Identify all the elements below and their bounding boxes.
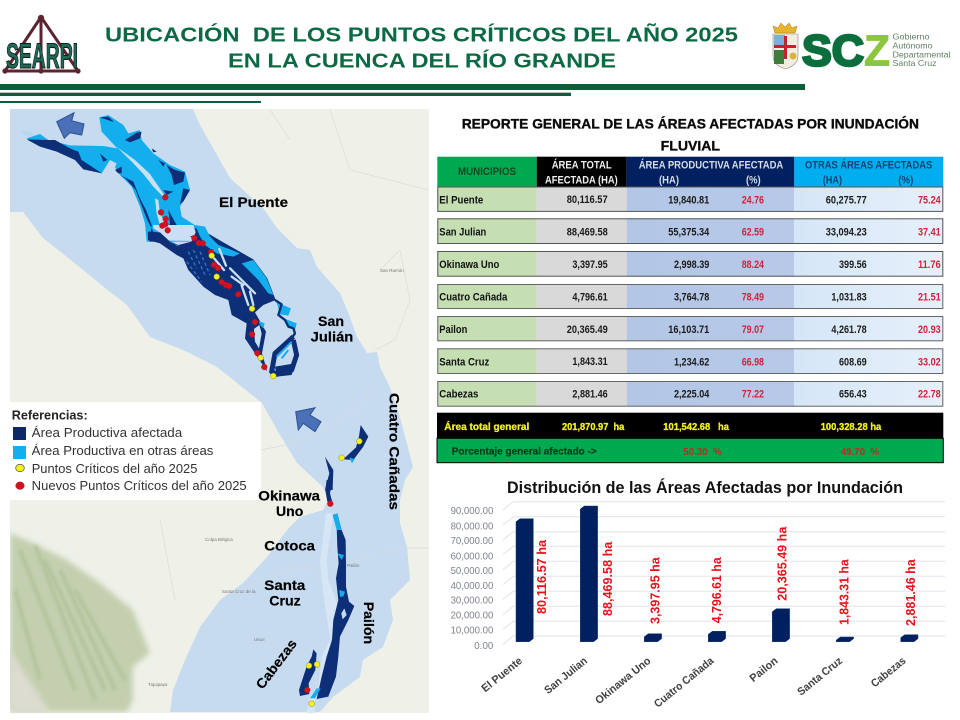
row: Santa Cruz: 1,843.31: [572, 356, 608, 368]
icon: crown: [773, 23, 797, 33]
logo: Gobierno Autónomo Departamental Santa Cruz: [773, 23, 951, 76]
logo: Gobierno Autónomo Departamental Santa Cruz: Santa Cruz: [892, 58, 936, 68]
bar: Okinawa Uno: [644, 634, 662, 642]
bar chart: [451, 502, 945, 710]
row: Cabezas: 2,881.46: [572, 388, 608, 400]
row: Okinawa Uno: [437, 251, 943, 277]
category labels: Santa Cruz: [795, 655, 845, 698]
table header: (%): [898, 175, 914, 187]
map label: Cabezas: Cabezas: [253, 636, 300, 692]
row: Cabezas: [437, 381, 943, 407]
row: San Julian: 55,375.34: [668, 227, 710, 239]
row: San Julian: San Julian: [439, 227, 487, 239]
row: Pailon: [437, 316, 943, 341]
map label: Pailón: Pailón: [361, 602, 376, 644]
map: Cuatro Cañadas patch: [349, 457, 355, 463]
data labels: 2,881.46 ha: [904, 558, 918, 626]
row: Okinawa Uno: 3,397.95: [572, 259, 608, 271]
row: Santa Cruz: 66.98: [742, 356, 764, 368]
map: loop lower mass: [275, 364, 292, 377]
total row: [437, 413, 943, 438]
table header: OTRAS ÁREAS AFECTADAS: [805, 158, 932, 172]
table header: MUNICIPIOS: [458, 166, 516, 178]
map: middle river flood area: [148, 225, 297, 377]
logo: Gobierno Autónomo Departamental Santa Cruz: Autónomo: [892, 40, 933, 50]
logo: Gobierno Autónomo Departamental Santa Cruz: Z: [864, 26, 890, 76]
row: Cuatro Cañada: 3,764.78: [674, 292, 709, 304]
map: roads and places: Usuri: [254, 637, 265, 642]
map label: San Julián: Julián: [311, 330, 353, 345]
bar: San Julian: [580, 506, 598, 642]
logo: SEARPI: [2, 15, 81, 77]
row: Cabezas: 77.22: [742, 389, 764, 401]
row: El Puente: 19,840.81: [668, 194, 709, 206]
legend: Referencias:: [12, 408, 88, 422]
row: Santa Cruz: Santa Cruz: [439, 356, 490, 368]
chart title: Distribución de las Áreas Afectadas por Inundación: [507, 478, 903, 497]
header rule lines: [0, 84, 805, 103]
map: pale channels: [213, 249, 255, 305]
map: light tip: [259, 321, 265, 328]
y axis labels: 80,000.00: [451, 521, 493, 533]
logo: Gobierno Autónomo Departamental Santa Cruz: SC: [802, 26, 864, 76]
bars: [516, 506, 918, 642]
title: [105, 22, 738, 72]
map: flecks: [170, 242, 210, 282]
map: small channel hole: [254, 325, 262, 348]
map: Cuatro Cañadas flood area: [325, 425, 368, 490]
bar: Pailon: [772, 609, 790, 642]
map label: Okinawa Uno: [258, 490, 320, 516]
map label: Okinawa Uno: Okinawa: [258, 489, 321, 504]
row: San Julian: 33,094.23: [826, 227, 867, 239]
row: El Puente: El Puente: [439, 194, 483, 206]
map: river channel: [118, 148, 192, 241]
panel: map: [10, 109, 429, 713]
row: Cuatro Cañada: 1,031.83: [831, 292, 867, 304]
row: Pailon: 16,103.71: [668, 324, 709, 336]
category labels: Cabezas: [869, 655, 908, 690]
map: loop: [272, 337, 297, 374]
row: Santa Cruz: 1,234.62: [674, 356, 709, 368]
report heading: REPORTE GENERAL DE LAS ÁREAS AFECTADAS POR INUNDACIÓN: [462, 114, 919, 131]
row: El Puente: 75.24: [918, 194, 941, 206]
category labels: El Puente: [479, 655, 525, 695]
bar: El Puente: [516, 519, 533, 642]
y axis labels: 20,000.00: [451, 609, 493, 621]
y axis labels: 10,000.00: [451, 624, 493, 636]
row: El Puente: 24.76: [742, 194, 764, 206]
report heading: [462, 114, 919, 154]
y axis labels: 40,000.00: [451, 580, 493, 592]
bar: Santa Cruz: [836, 637, 854, 642]
category labels: San Julian: [542, 655, 590, 697]
row: Santa Cruz: [437, 348, 943, 374]
map: new critical points: [158, 194, 333, 693]
map: upper river flood area: [20, 115, 203, 242]
table header: ÁREA PRODUCTIVA AFECTADA: [639, 158, 783, 172]
map: roads and places: Tiquipaya: [148, 682, 168, 687]
map: Okinawa flood area: [325, 457, 333, 490]
row: Cuatro Cañada: 4,796.61: [572, 292, 608, 304]
legend: [10, 402, 261, 500]
map: roads and places: San Ramón: [380, 268, 404, 273]
row: Pailon: 20.93: [918, 324, 941, 336]
row: Cuatro Cañada: 21.51: [918, 292, 941, 304]
data labels: 80,116.57 ha: [535, 539, 549, 614]
map label: San Julián: San: [318, 314, 344, 329]
map: pale channel behind: [153, 225, 196, 236]
category labels: [479, 654, 908, 710]
row: Cuatro Cañada: Cuatro Cañada: [439, 292, 508, 304]
map label: Santa Cruz: Cruz: [269, 594, 301, 609]
y axis labels: 90,000.00: [451, 505, 493, 517]
row: Cabezas: 2,225.04: [674, 389, 710, 401]
map: north-east spine: [275, 300, 295, 338]
icon: shield: [773, 34, 798, 69]
table header: [437, 157, 943, 187]
y axis labels: [451, 505, 493, 652]
row: Okinawa Uno: Okinawa Uno: [439, 259, 500, 271]
row: Pailon: 4,261.78: [831, 324, 867, 336]
logo: Gobierno Autónomo Departamental Santa Cruz: Gobierno: [892, 32, 930, 42]
map background: [10, 109, 429, 713]
row: San Julian: 37.41: [918, 227, 941, 239]
row: El Puente: 60,275.77: [826, 194, 867, 206]
terrain: mountains: [10, 533, 150, 712]
bar: Cuatro Cañada: [708, 631, 726, 642]
panel: report table: [437, 157, 943, 463]
percentage row: 49.70 %: [841, 446, 880, 458]
row: Okinawa Uno: 88.24: [742, 259, 765, 271]
data labels: 3,397.95 ha: [648, 556, 662, 624]
row: Okinawa Uno: 2,998.39: [674, 259, 709, 271]
legend: Nuevos Puntos Críticos del año 2025: [32, 478, 247, 493]
table header: (%): [746, 175, 761, 187]
map label: Santa Cruz: [264, 580, 306, 606]
row: Cuatro Cañada: [437, 284, 943, 309]
table header: AFECTADA (HA): [545, 175, 618, 187]
row: Pailon: Pailon: [439, 324, 468, 336]
row: Cuatro Cañada: 78.49: [742, 292, 764, 304]
bar: Cabezas: [901, 635, 918, 642]
row: Okinawa Uno: 399.56: [839, 259, 867, 271]
row: El Puente: 80,116.57: [567, 194, 608, 206]
map: basin area: [10, 109, 413, 712]
data labels: 4,796.61 ha: [710, 556, 724, 623]
table header: (HA): [659, 175, 679, 187]
legend: Área Productiva afectada: [32, 425, 183, 440]
map label: Santa Cruz: Santa: [264, 578, 306, 593]
map: roads and places: Pailón: [347, 563, 360, 568]
row: San Julian: 62.59: [742, 227, 764, 239]
map: critical points: [209, 253, 362, 707]
y axis labels: 60,000.00: [451, 550, 493, 562]
row: El Puente: [437, 187, 943, 212]
y axis labels: 70,000.00: [451, 535, 493, 547]
row: Pailon: 79.07: [742, 324, 764, 336]
map label: San Julián: [310, 316, 352, 342]
map: roads and places: Santa Cruz de la: [222, 589, 256, 594]
percentage row: [437, 438, 943, 463]
row: San Julian: [437, 218, 943, 244]
map: north-east light patches: [195, 225, 297, 331]
total row: Área total general: [444, 420, 529, 433]
category labels: Okinawa Uno: [593, 655, 654, 707]
table header: (HA): [823, 175, 842, 187]
y axis labels: 50,000.00: [451, 565, 493, 577]
row: San Julian: 88,469.58: [567, 226, 608, 238]
table header: ÁREA TOTAL: [552, 158, 612, 172]
map: Cabezas flood area: [299, 649, 317, 696]
chart grid: [503, 502, 945, 644]
arrow: middle flow direction: [296, 408, 321, 432]
y axis labels: 0.00: [474, 640, 493, 652]
title: EN LA CUENCA DEL RÍO GRANDE: [228, 50, 616, 72]
map: main flooded mass: [148, 230, 276, 372]
percentage row: Porcentaje general afectado ->: [452, 446, 597, 458]
y axis labels: 30,000.00: [451, 595, 493, 607]
category labels: Pailon: [748, 655, 781, 685]
title: UBICACIÓN DE LOS PUNTOS CRÍTICOS DEL AÑO 2025: [105, 22, 738, 46]
total row: 100,328.28 ha: [821, 421, 881, 433]
map label: El Puente: El Puente: [219, 195, 289, 210]
total row: 201,870.97 ha: [562, 421, 624, 433]
total row: 101,542.68 ha: [663, 421, 729, 433]
map: roads and places: Colpa Bélgica: [205, 537, 233, 542]
map label: Cotoca: Cotoca: [264, 539, 316, 554]
legend: Puntos Críticos del año 2025: [32, 461, 197, 476]
arrow: upper flow direction: [57, 113, 84, 138]
map: loop light section: [277, 342, 292, 358]
logo: Gobierno Autónomo Departamental Santa Cruz: Departamental: [892, 50, 951, 60]
map: lower river flood area: [299, 480, 354, 713]
row: Cabezas: 22.78: [918, 389, 941, 401]
data labels: [535, 526, 918, 626]
row: Santa Cruz: 33.02: [918, 356, 941, 368]
logo: SEARPI: SEARPI: [6, 37, 78, 77]
row: Okinawa Uno: 11.76: [918, 259, 941, 271]
percentage row: 50.30 %: [683, 446, 722, 458]
report heading: FLUVIAL: [661, 138, 720, 154]
data labels: 20,365.49 ha: [776, 526, 790, 601]
map: roads and places: [148, 110, 429, 687]
row: Cabezas: 656.43: [839, 389, 867, 401]
row: Pailon: 20,365.49: [567, 324, 608, 336]
row: Cabezas: Cabezas: [439, 389, 478, 401]
map label: Okinawa Uno: Uno: [276, 504, 303, 519]
legend: Área Productiva en otras áreas: [32, 443, 214, 458]
data labels: 1,843.31 ha: [838, 558, 852, 625]
data labels: 88,469.58 ha: [601, 541, 615, 616]
category labels: Cuatro Cañada: [652, 654, 717, 710]
row: Santa Cruz: 608.69: [839, 356, 867, 368]
map label: Cuatro Cañadas: Cuatro Cañadas: [386, 393, 402, 510]
